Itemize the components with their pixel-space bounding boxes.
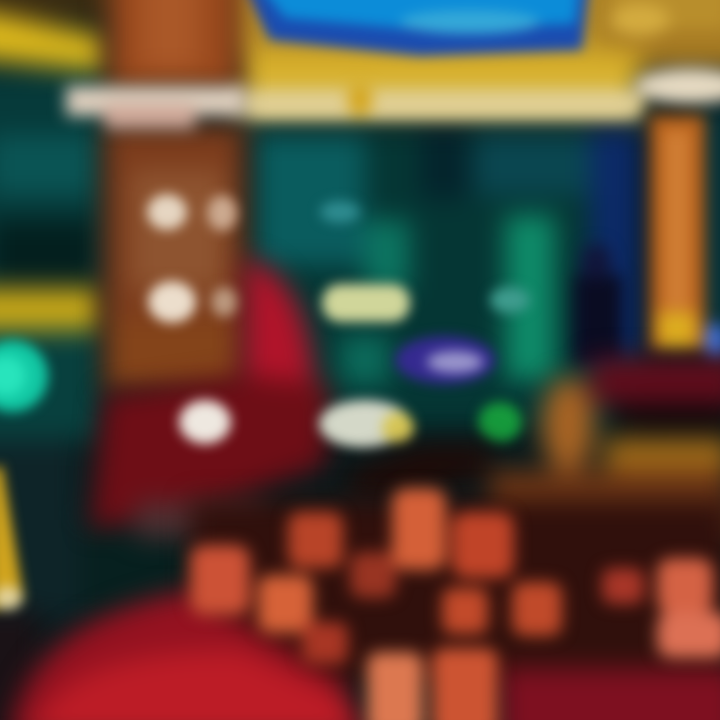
- blue ceiling panel: [240, 0, 590, 56]
- right orange column: [650, 115, 720, 362]
- central teal panel: [250, 110, 720, 428]
- table and golden items: [340, 358, 720, 540]
- brown column: [104, 0, 244, 390]
- orange gift boxes: [190, 488, 720, 720]
- glowing lights: [0, 194, 530, 448]
- bottom red cloth: [10, 500, 720, 720]
- left candle: [0, 465, 24, 612]
- white frieze: [66, 0, 720, 129]
- red chair and seating: [90, 258, 330, 538]
- dark figure: [574, 244, 622, 365]
